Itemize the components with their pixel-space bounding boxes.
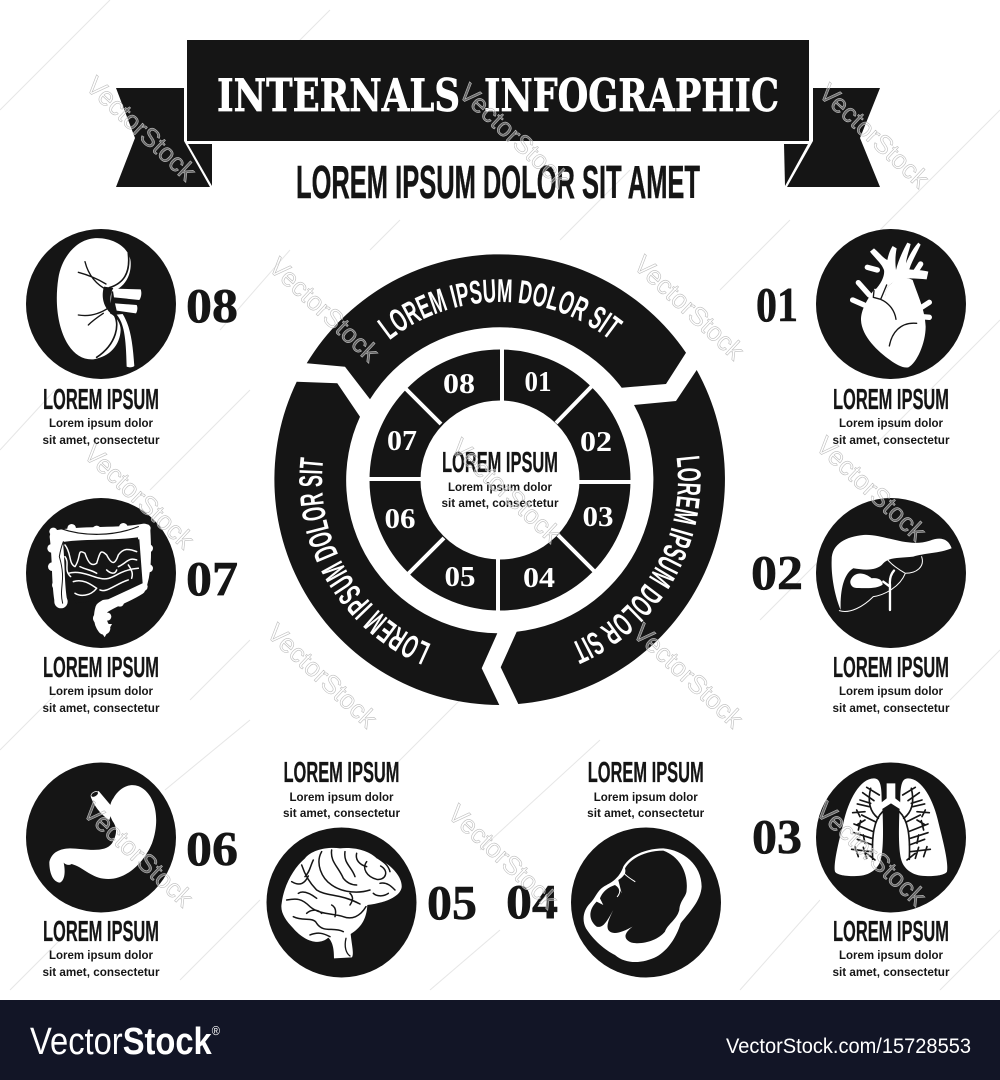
- wheel numbers: [384, 366, 614, 594]
- ribbon left tail: [116, 88, 210, 187]
- number 02: 02: [751, 545, 803, 600]
- item 03: lungs: [752, 762, 966, 979]
- caption 08: LOREM IPSUM: [43, 384, 159, 416]
- title: INFOGRAPHIC: [484, 69, 779, 122]
- watermarks: VectorStock: [813, 77, 936, 194]
- watermarks: VectorStock: [810, 795, 933, 912]
- wheel numbers: 07: [387, 425, 417, 457]
- number 05: 05: [427, 875, 477, 930]
- watermarks: VectorStock: [261, 617, 384, 734]
- watermarks: VectorStock: [78, 438, 201, 555]
- item 06: stomach: [26, 762, 238, 979]
- icon: spleen: [571, 828, 721, 978]
- ribbon right tail: [787, 88, 880, 187]
- caption 06: sit amet, consectetur: [42, 967, 160, 979]
- caption 02: [832, 652, 950, 715]
- number 04: 04: [506, 874, 558, 929]
- watermarks: [77, 70, 936, 915]
- icon: liver: [816, 498, 966, 648]
- central circular diagram: [274, 254, 725, 705]
- caption 08: [42, 384, 160, 447]
- caption 05: LOREM IPSUM: [284, 757, 400, 789]
- caption 07: [42, 652, 160, 715]
- inner segmented wheel: [395, 375, 605, 585]
- caption 06: [42, 916, 160, 979]
- icon: brain: [266, 828, 416, 978]
- number 03: 03: [752, 809, 802, 864]
- caption 02: sit amet, consectetur: [832, 703, 950, 715]
- outer ring segment: left: [274, 382, 499, 705]
- icon: heart: [816, 229, 966, 379]
- icon: kidney: [26, 229, 176, 379]
- watermarks: VectorStock: [628, 249, 751, 366]
- ring label right: LOREM IPSUM DOLOR SIT: [574, 456, 701, 664]
- footer url: VectorStock.com/15728553: [726, 1035, 971, 1058]
- wheel numbers: 03: [582, 501, 614, 533]
- caption 04: sit amet, consectetur: [587, 808, 705, 820]
- caption 01: Lorem ipsum dolor: [839, 418, 944, 430]
- watermarks: VectorStock: [263, 251, 386, 368]
- caption 05: Lorem ipsum dolor: [290, 792, 394, 804]
- watermarks: VectorStock: [80, 70, 203, 187]
- center text: sit amet, consectetur: [442, 498, 559, 510]
- icon: lungs: [816, 762, 966, 912]
- outer ring segment: top: [307, 254, 686, 399]
- ring label left: LOREM IPSUM DOLOR SIT: [299, 457, 430, 664]
- caption 06: Lorem ipsum dolor: [49, 950, 154, 962]
- item 08: kidney: [26, 229, 238, 447]
- footer logo: ®: [212, 1023, 220, 1038]
- ribbon main band: [187, 40, 809, 141]
- item 02: liver: [751, 498, 966, 715]
- number 08: 08: [186, 278, 238, 333]
- wheel numbers: 02: [580, 426, 612, 458]
- footer bar: [0, 1000, 1000, 1080]
- watermarks: VectorStock: [442, 798, 565, 915]
- title: INTERNALS: [217, 69, 460, 122]
- item 01: heart: [756, 229, 966, 447]
- caption 01: sit amet, consectetur: [832, 435, 950, 447]
- icon: stomach: [26, 762, 176, 912]
- title ribbon: [116, 40, 880, 187]
- caption 07: Lorem ipsum dolor: [49, 686, 154, 698]
- ribbon left fold: [188, 144, 212, 186]
- caption 06: LOREM IPSUM: [43, 916, 159, 948]
- footer logo: VectorStock: [30, 1021, 226, 1063]
- number 06: 06: [186, 821, 238, 876]
- wheel numbers: 04: [523, 562, 555, 594]
- center text: Lorem ipsum dolor: [448, 482, 553, 494]
- watermarks: VectorStock: [810, 430, 933, 547]
- caption 08: Lorem ipsum dolor: [49, 418, 154, 430]
- caption 07: sit amet, consectetur: [42, 703, 160, 715]
- caption 04: Lorem ipsum dolor: [594, 792, 698, 804]
- caption 02: Lorem ipsum dolor: [839, 686, 944, 698]
- caption 03: Lorem ipsum dolor: [839, 950, 944, 962]
- caption 05: [283, 757, 401, 820]
- caption 01: [832, 384, 950, 447]
- watermarks: VectorStock: [453, 77, 576, 194]
- item 04: spleen: [506, 757, 721, 978]
- caption 07: LOREM IPSUM: [43, 652, 159, 684]
- number 07: 07: [186, 551, 238, 606]
- watermarks: VectorStock: [445, 432, 568, 549]
- ribbon right fold: [784, 144, 808, 186]
- wheel numbers: 01: [524, 366, 552, 398]
- number 01: 01: [756, 277, 798, 332]
- center text: [442, 447, 559, 510]
- caption 03: [832, 916, 950, 979]
- wheel numbers: 06: [384, 503, 416, 535]
- center text: LOREM IPSUM: [442, 447, 558, 479]
- watermarks: VectorStock: [627, 617, 750, 734]
- caption 08: sit amet, consectetur: [42, 435, 160, 447]
- watermarks: VectorStock: [77, 796, 200, 913]
- ring label top: LOREM IPSUM DOLOR SIT: [376, 279, 624, 340]
- outer ring segment: right: [501, 370, 725, 704]
- caption 04: [587, 757, 705, 820]
- icon: intestines: [26, 498, 176, 648]
- item 05: brain: [266, 757, 477, 978]
- caption 04: LOREM IPSUM: [588, 757, 704, 789]
- caption 03: sit amet, consectetur: [832, 967, 950, 979]
- item 07: intestines: [26, 498, 238, 715]
- wheel numbers: 08: [443, 368, 475, 400]
- caption 05: sit amet, consectetur: [283, 808, 401, 820]
- wheel numbers: 05: [444, 561, 476, 593]
